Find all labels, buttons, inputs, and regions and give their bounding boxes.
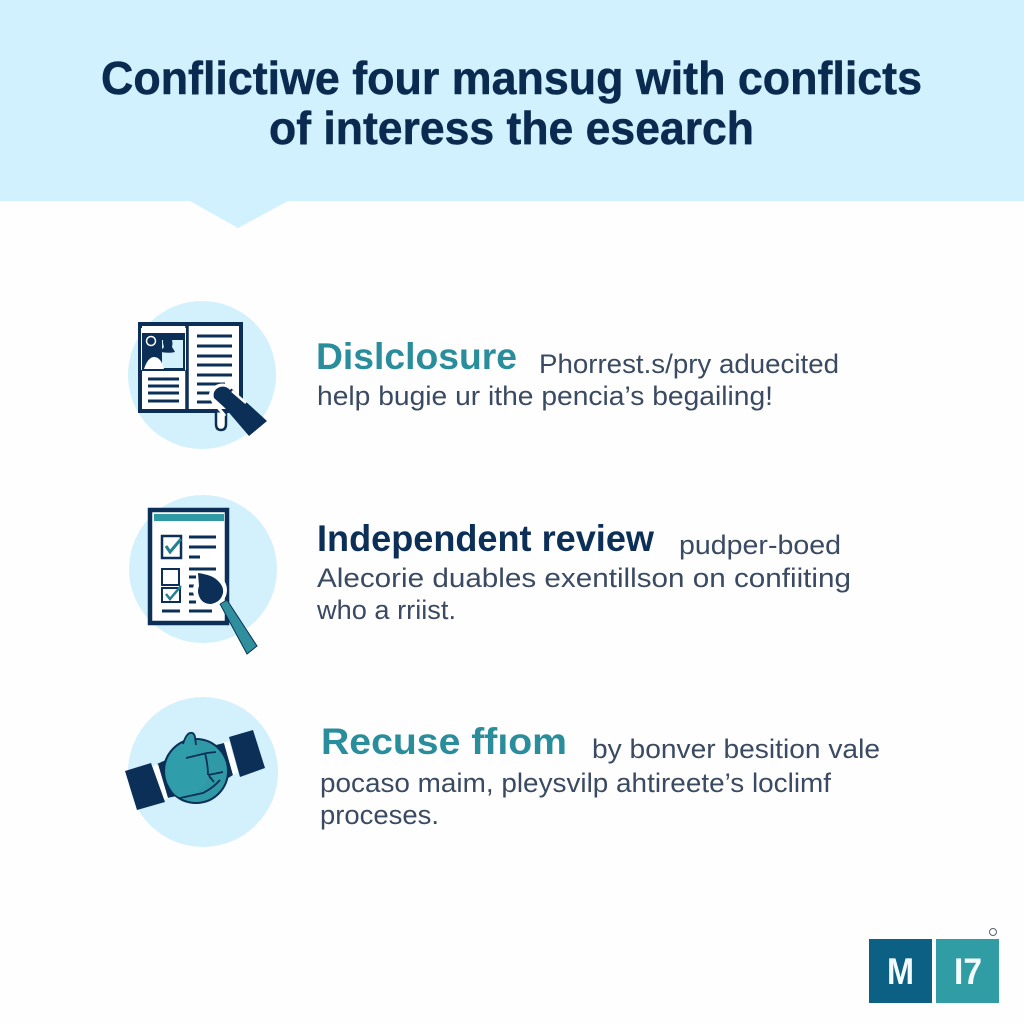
icon: checklist with magnifier (129, 495, 277, 654)
title (101, 52, 922, 154)
text block: recuse: by bonver besition vale (592, 734, 880, 764)
heading: independent review: Independent review (317, 518, 654, 559)
panel: independent review (129, 495, 851, 654)
text block: disclosure (317, 349, 839, 411)
text block: disclosure: Phorrest.s/pry aduecited (539, 349, 839, 379)
text block: recuse: proceses. (320, 800, 439, 830)
panel: recuse (125, 697, 880, 847)
text block: independent review: pudper-boed (679, 530, 841, 560)
logo: I7 (954, 951, 982, 992)
logo (869, 928, 999, 1003)
text block: disclosure: help bugie ur ithe pencia’s begailing! (317, 381, 773, 411)
title: of interess the esearch (269, 102, 754, 154)
heading: recuse: Recuse ffıom (321, 721, 567, 762)
text block: independent review (316, 530, 851, 625)
text block: recuse: pocaso maim, pleysvilp ahtireete’s loclimf (320, 768, 832, 798)
icon: open book with hand (128, 301, 276, 449)
heading: disclosure: Dislclosure (316, 336, 517, 377)
title: Conflictiwe four mansug with conflicts (101, 52, 922, 104)
icon: handshake fist (125, 697, 278, 847)
logo: M (887, 951, 914, 992)
panel: disclosure (128, 301, 839, 449)
text block: independent review: who a rriist. (316, 595, 456, 625)
text block: recuse (320, 734, 880, 830)
text block: independent review: Alecorie duables exentillson on confiiting (317, 563, 851, 593)
header banner (0, 0, 1024, 228)
